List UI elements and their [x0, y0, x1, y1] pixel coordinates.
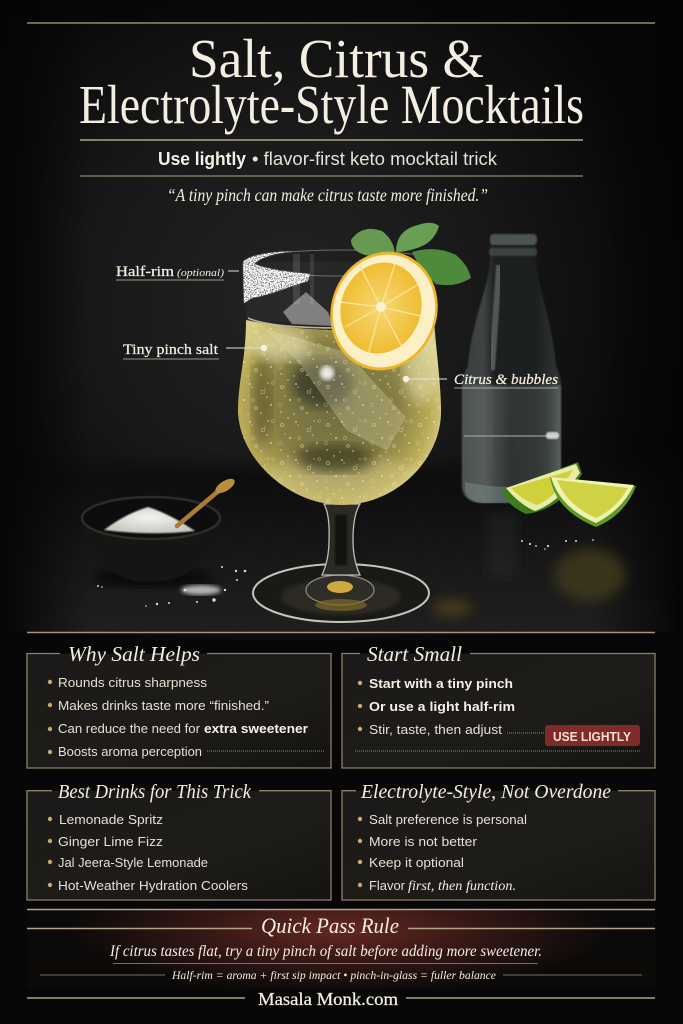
bullets: Flavor — [369, 879, 405, 893]
bullets: Makes drinks taste more “finished.” — [58, 699, 269, 713]
bullets: Start with a tiny pinch — [369, 677, 513, 691]
title: Electrolyte-Style Mocktails — [79, 74, 584, 135]
bullets: More is not better — [369, 835, 477, 849]
bullets: Salt preference is personal — [369, 813, 527, 827]
illustration: table reflections — [432, 512, 626, 616]
callout: tiny pinch salt: Tiny pinch salt — [123, 342, 219, 358]
bullets: Ginger Lime Fizz — [58, 835, 163, 849]
title: Salt, Citrus & — [189, 28, 484, 89]
rule sentence: If citrus tastes flat, try a tiny pinch of salt before adding more sweetener. — [109, 943, 542, 960]
panel: start small — [342, 642, 655, 768]
ice cubes — [267, 292, 405, 450]
illustration: lime wedges — [502, 462, 636, 527]
bullets: Stir, taste, then adjust — [369, 723, 503, 737]
bullets: Or use a light half-rim — [369, 700, 515, 714]
panel: best drinks — [27, 781, 331, 900]
bullets: Lemonade Spritz — [59, 813, 163, 827]
subtitle: Use lightly — [158, 149, 246, 169]
callout: tiny pinch salt — [123, 342, 267, 359]
bullets — [358, 813, 527, 894]
callout: half-rim — [116, 264, 239, 280]
bullets: extra sweetener — [204, 722, 308, 736]
illustration: salt bowl with spoon — [82, 476, 237, 587]
salt rim — [243, 251, 310, 303]
spoon — [177, 476, 237, 526]
callout: half-rim: (optional) — [177, 267, 224, 279]
illustration: glass — [238, 250, 441, 623]
heading: Best Drinks for This Trick — [58, 781, 252, 803]
badge: use lightly — [545, 725, 640, 746]
badge: use lightly: USE LIGHTLY — [553, 730, 632, 744]
illustration: scattered salt — [97, 539, 594, 607]
salt mound — [104, 507, 195, 533]
glass stem — [322, 504, 360, 575]
glass upper empty part — [245, 262, 437, 322]
background — [30, 24, 653, 632]
bullets: Boosts aroma perception — [58, 745, 202, 759]
callout: half-rim: Half-rim — [116, 264, 175, 280]
footer: brand: Masala Monk.com — [258, 989, 398, 1009]
bullets: Rounds citrus sharpness — [58, 676, 207, 690]
bullets: Can reduce the need for — [58, 722, 200, 736]
drink — [238, 320, 441, 505]
bullets: Jal Jeera-Style Lemonade — [58, 856, 208, 870]
illustration: mint leaves — [351, 223, 471, 285]
bullets: first, then function. — [408, 879, 516, 894]
heading: Electrolyte-Style, Not Overdone — [360, 781, 611, 803]
title block — [27, 23, 655, 205]
bullets — [48, 676, 325, 759]
heading: Quick Pass Rule — [261, 913, 399, 938]
panel: why salt helps — [27, 642, 331, 768]
bullets: Keep it optional — [369, 856, 464, 870]
panel: electrolyte-style — [342, 781, 655, 900]
heading: Why Salt Helps — [68, 642, 200, 666]
illustration: bottle of sparkling water — [462, 234, 561, 503]
title — [79, 28, 584, 135]
liquid surface — [248, 318, 434, 328]
bullets — [355, 677, 641, 751]
callout: citrus and bubbles: Citrus & bubbles — [454, 372, 558, 388]
bullets: Hot-Weather Hydration Coolers — [58, 879, 248, 893]
subtitle: • flavor-first keto mocktail trick — [252, 149, 498, 169]
bullets — [48, 813, 248, 893]
panel: quick pass rule — [27, 909, 655, 989]
illustration: lemon slice — [315, 238, 453, 384]
heading: Start Small — [367, 642, 462, 666]
rule note: Half-rim = aroma + first sip impact • pinch-in-glass = fuller balance — [171, 970, 496, 982]
glass foot — [253, 564, 429, 622]
callout: citrus and bubbles — [403, 372, 558, 388]
quote: “A tiny pinch can make citrus taste more finished.” — [167, 185, 488, 205]
